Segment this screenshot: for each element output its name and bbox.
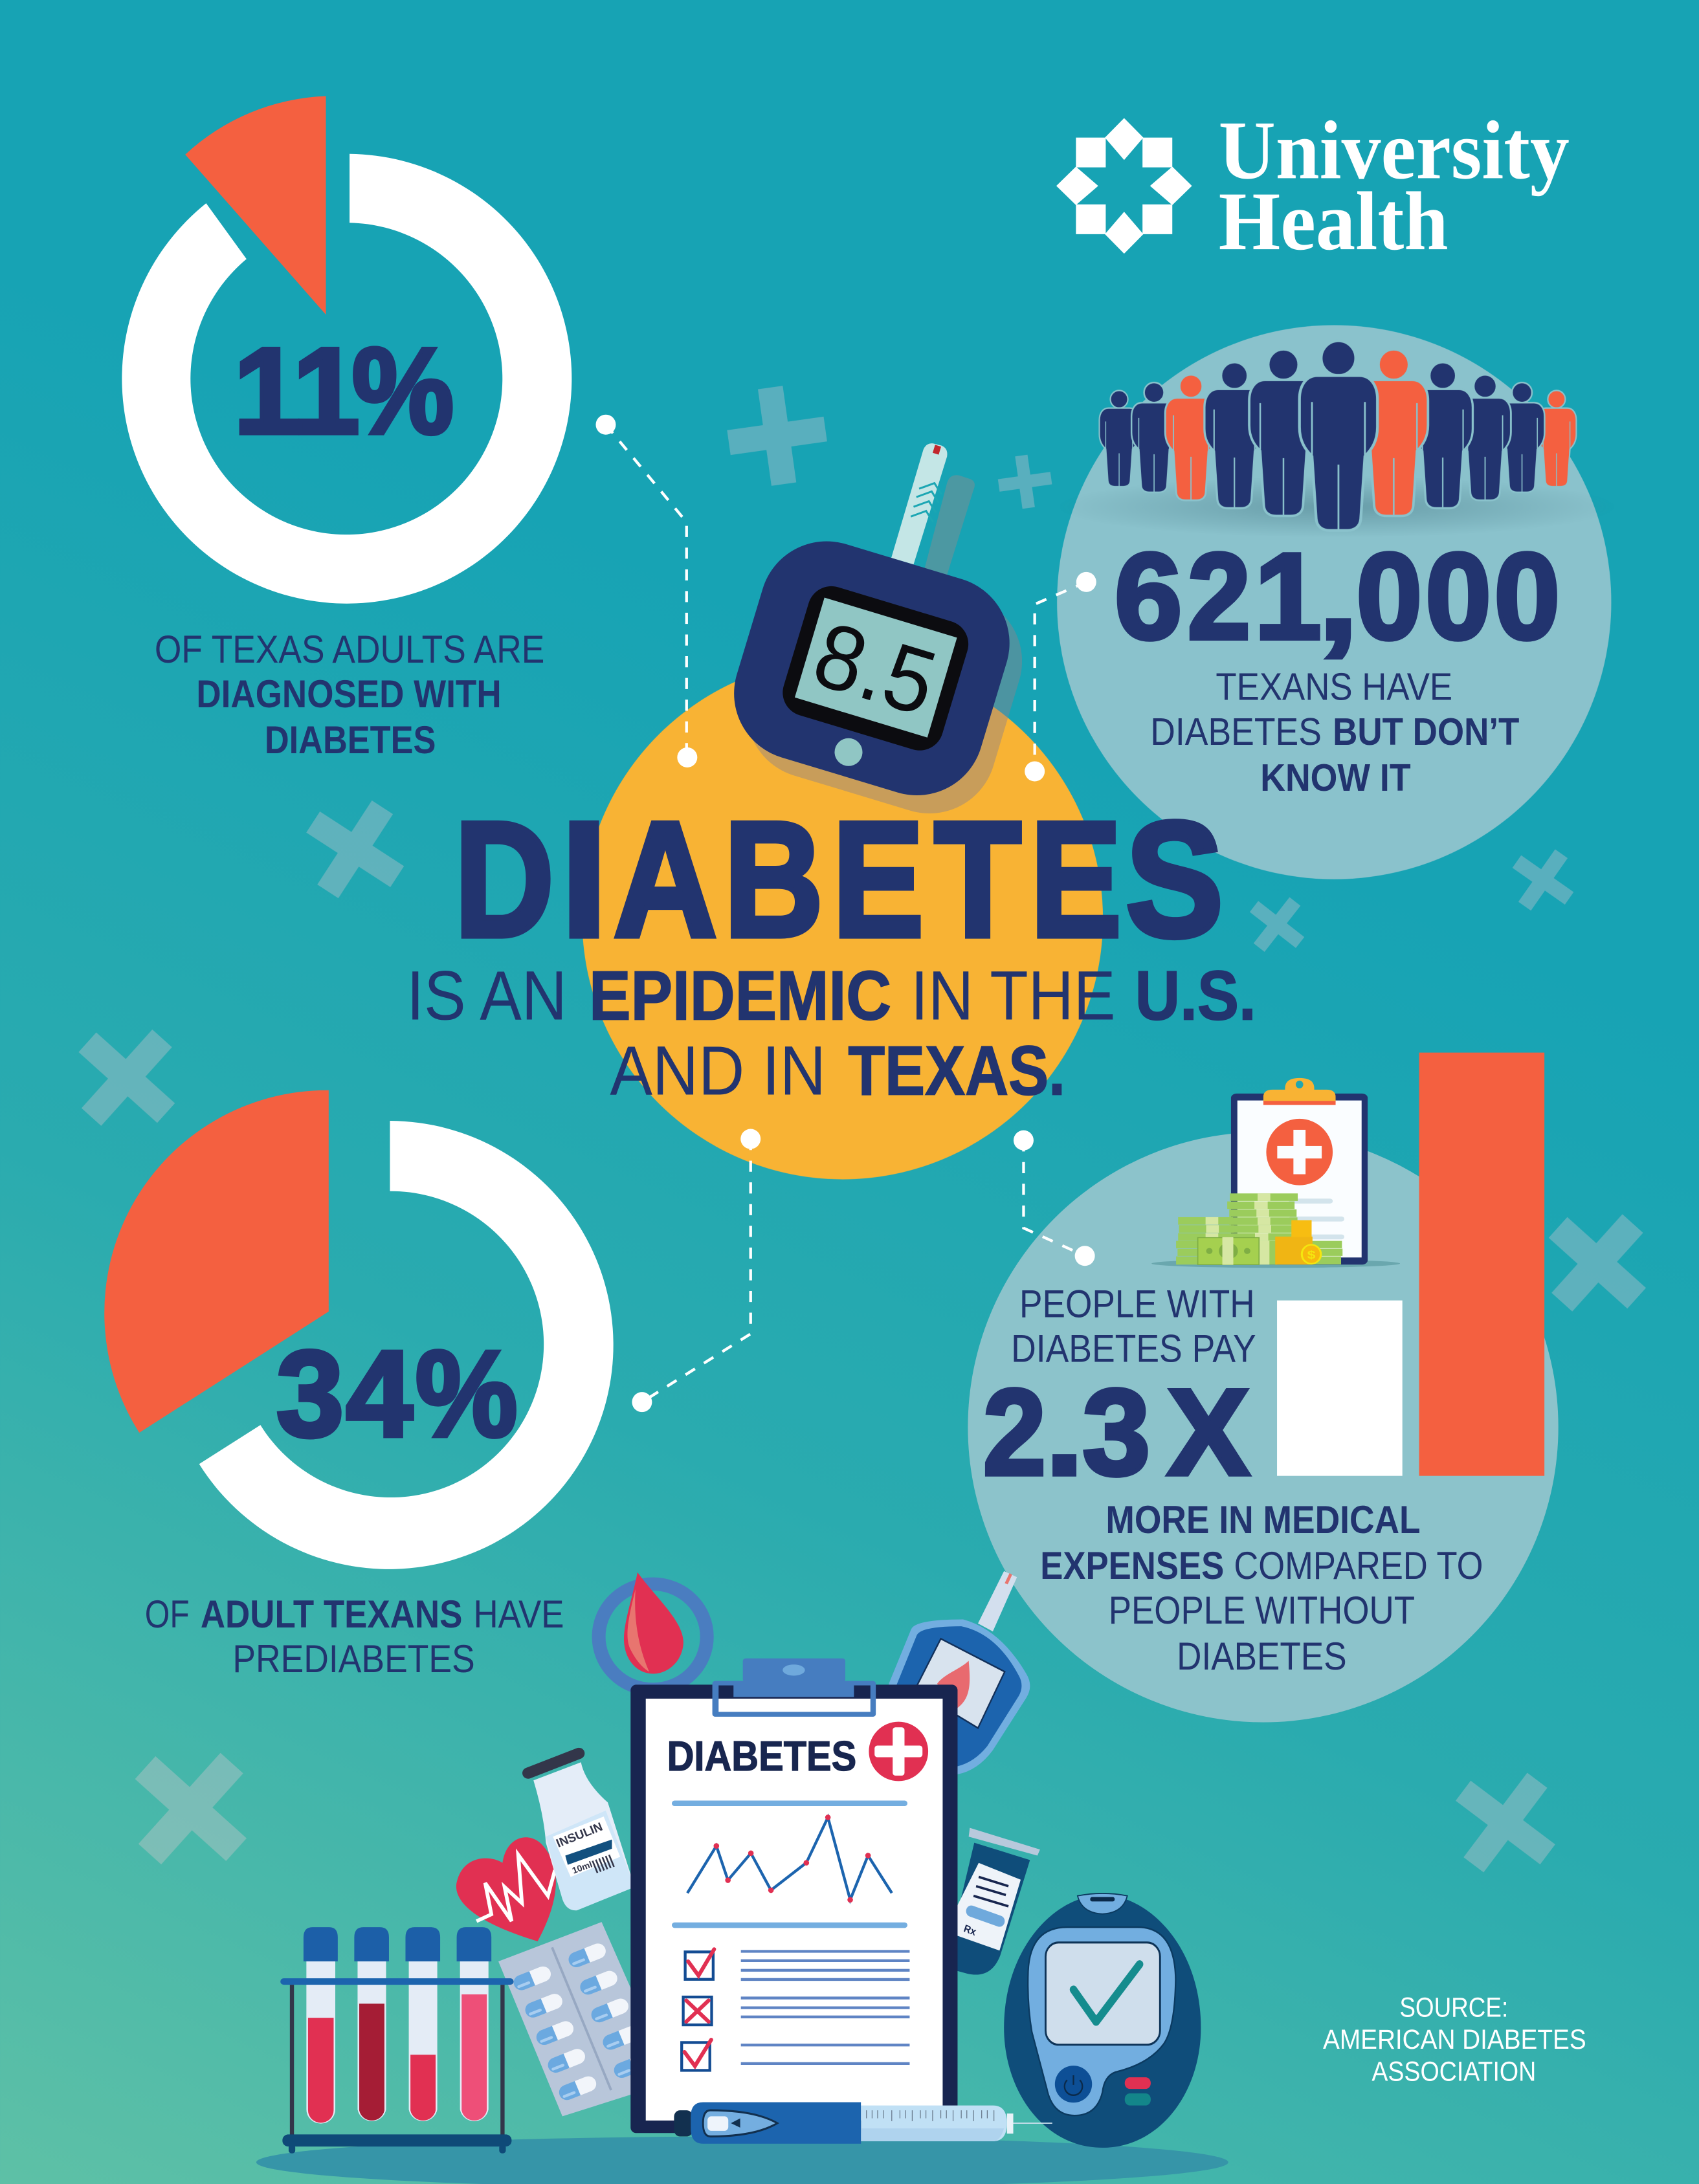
stat: 2.3 X: X (1167, 1365, 1250, 1501)
title: Diabetes is an epidemic: TEXAS. (848, 1032, 1065, 1110)
caption: adult Texans prediabetes: OF (145, 1592, 190, 1636)
source note: SOURCE: (1399, 1992, 1508, 2024)
stat: 11%: 1 (234, 323, 301, 459)
stat: 2.3 X: 2 (983, 1365, 1046, 1501)
source note (1323, 1992, 1586, 2088)
icon: prescription bottle: Rx (962, 1923, 977, 1938)
title: Diabetes is an epidemic: A (614, 788, 717, 971)
title: Diabetes is an epidemic: EPIDEMIC (589, 957, 891, 1035)
text: people with diabetes pay: DIABETES PAY (1011, 1326, 1256, 1370)
caption: more in medical expenses: MORE IN MEDICAL (1105, 1497, 1421, 1541)
stat: 621,000: 1 (1254, 529, 1322, 665)
icon: insulin vial: 10ml (571, 1859, 594, 1875)
title: Diabetes is an epidemic: I (561, 788, 607, 971)
title: Diabetes is an epidemic: D (454, 788, 554, 971)
caption: more in medical expenses: DIABETES (1177, 1634, 1347, 1678)
icon: glucose meter with test strip: 8.5 (803, 602, 948, 736)
stat: 34%: % (416, 1326, 518, 1462)
icon: test tubes in rack (280, 1927, 514, 2154)
icon: clipboard with money (1151, 1078, 1400, 1268)
icon: blood drop in ring (599, 1572, 707, 1690)
icon: prescription bottle (944, 1828, 1040, 1975)
source note: AMERICAN DIABETES (1323, 2024, 1586, 2055)
icon: blister pack (498, 1922, 655, 2116)
clipboard heading: DIABETES (667, 1733, 856, 1780)
title: Diabetes is an epidemic: AND IN (610, 1032, 826, 1110)
panel: 621,000 circle (1057, 325, 1616, 879)
caption: Texans have diabetes but don't know it (1150, 665, 1519, 799)
caption: adult Texans prediabetes: ADULT TEXANS (201, 1592, 462, 1636)
icon: medical clipboard (630, 1659, 957, 2133)
icon: small glucose meter (889, 1571, 1030, 1774)
bar chart: cost comparison (1277, 1053, 1544, 1476)
stat: 2.3 X: . (1045, 1365, 1083, 1501)
stat: 11%: 1 (293, 323, 360, 459)
panel: 2.3x medical expenses circle (968, 1053, 1559, 1723)
stat: 34%: 4 (346, 1326, 413, 1462)
caption: adult Texans prediabetes: PREDIABETES (232, 1637, 475, 1681)
stat: 11%: % (352, 323, 454, 459)
title: Diabetes is an epidemic: S (1126, 788, 1223, 971)
panel: 34% stat (104, 1090, 614, 1681)
caption: adult Texans prediabetes: HAVE (474, 1592, 564, 1636)
crowd of people (1058, 340, 1616, 538)
ground shadow (256, 2137, 1228, 2184)
caption: more in medical expenses: PEOPLE WITHOUT (1109, 1588, 1415, 1632)
source note: ASSOCIATION (1371, 2057, 1536, 2088)
icon: insulin vial: INSULIN (554, 1820, 605, 1851)
caption: Texans have diabetes but don't know it: TEXANS HAVE (1216, 665, 1452, 709)
logo: University Health (1056, 104, 1570, 267)
title: Diabetes is an epidemic: IN THE (911, 957, 1115, 1035)
caption: Texans have diabetes but don't know it: DIABETES (1150, 710, 1322, 753)
stat: 621,000: 0 (1425, 529, 1491, 665)
stat: 2.3 X: 3 (1082, 1365, 1150, 1501)
title: Diabetes is an epidemic: E (1030, 788, 1122, 971)
connector dots (595, 415, 1096, 1412)
caption: more in medical expenses (1040, 1497, 1483, 1678)
icon: red plus (869, 1722, 928, 1781)
icon: insulin vial (528, 1754, 635, 1910)
text: people with diabetes pay (1011, 1281, 1256, 1370)
stat: 621,000: 0 (1494, 529, 1560, 665)
icon: clipboard with money: $ (1307, 1249, 1316, 1261)
icon: glucose meter with test strip (718, 443, 1039, 830)
caption: Texans have diabetes but don't know it: KNOW IT (1260, 756, 1411, 799)
caption: of Texas adults (155, 627, 544, 762)
logo wordmark: University (1219, 104, 1570, 196)
logo wordmark: Health (1219, 175, 1449, 267)
illustration: diabetes supplies (256, 1571, 1228, 2184)
caption: of Texas adults: DIAGNOSED WITH (196, 672, 502, 716)
icon: star mark (1056, 118, 1192, 254)
title: Diabetes is an epidemic: IS AN (406, 957, 567, 1035)
stat: 621,000: 6 (1115, 529, 1183, 665)
logo wordmark (1219, 104, 1570, 267)
checklist (682, 1949, 909, 2070)
stat: 621,000: 0 (1356, 529, 1422, 665)
caption: of Texas adults: DIABETES (265, 718, 436, 762)
caption: of Texas adults: OF TEXAS ADULTS ARE (155, 627, 544, 671)
title: Diabetes is an epidemic (406, 788, 1256, 1110)
stat: 34%: 3 (276, 1326, 344, 1462)
caption: more in medical expenses: EXPENSES (1040, 1543, 1224, 1587)
caption: more in medical expenses: COMPARED TO (1234, 1543, 1483, 1587)
caption: adult Texans prediabetes (145, 1592, 564, 1681)
panel: 11% stat (122, 96, 572, 762)
icon: insulin pen (674, 2102, 1052, 2144)
decorative plus signs (52, 381, 1672, 1897)
title: Diabetes is an epidemic: E (832, 788, 924, 971)
title: Diabetes is an epidemic: B (724, 788, 823, 971)
dashed connector lines (606, 425, 1086, 1402)
center yellow circle (582, 659, 1103, 1179)
icon: large glucose meter (1004, 1893, 1201, 2148)
text: people with diabetes pay: PEOPLE WITH (1019, 1281, 1255, 1325)
donut chart: 34% (104, 1090, 614, 1569)
title: Diabetes is an epidemic: U.S. (1135, 957, 1256, 1035)
stat: 621,000: , (1318, 529, 1358, 665)
icon: heart with pulse (456, 1837, 556, 1941)
line chart (687, 1814, 892, 1903)
stat: 621,000: 2 (1188, 529, 1250, 665)
donut chart: 11% (122, 96, 572, 604)
title: Diabetes is an epidemic: T (935, 788, 1021, 971)
caption: Texans have diabetes but don't know it: BUT DON’T (1333, 710, 1519, 753)
